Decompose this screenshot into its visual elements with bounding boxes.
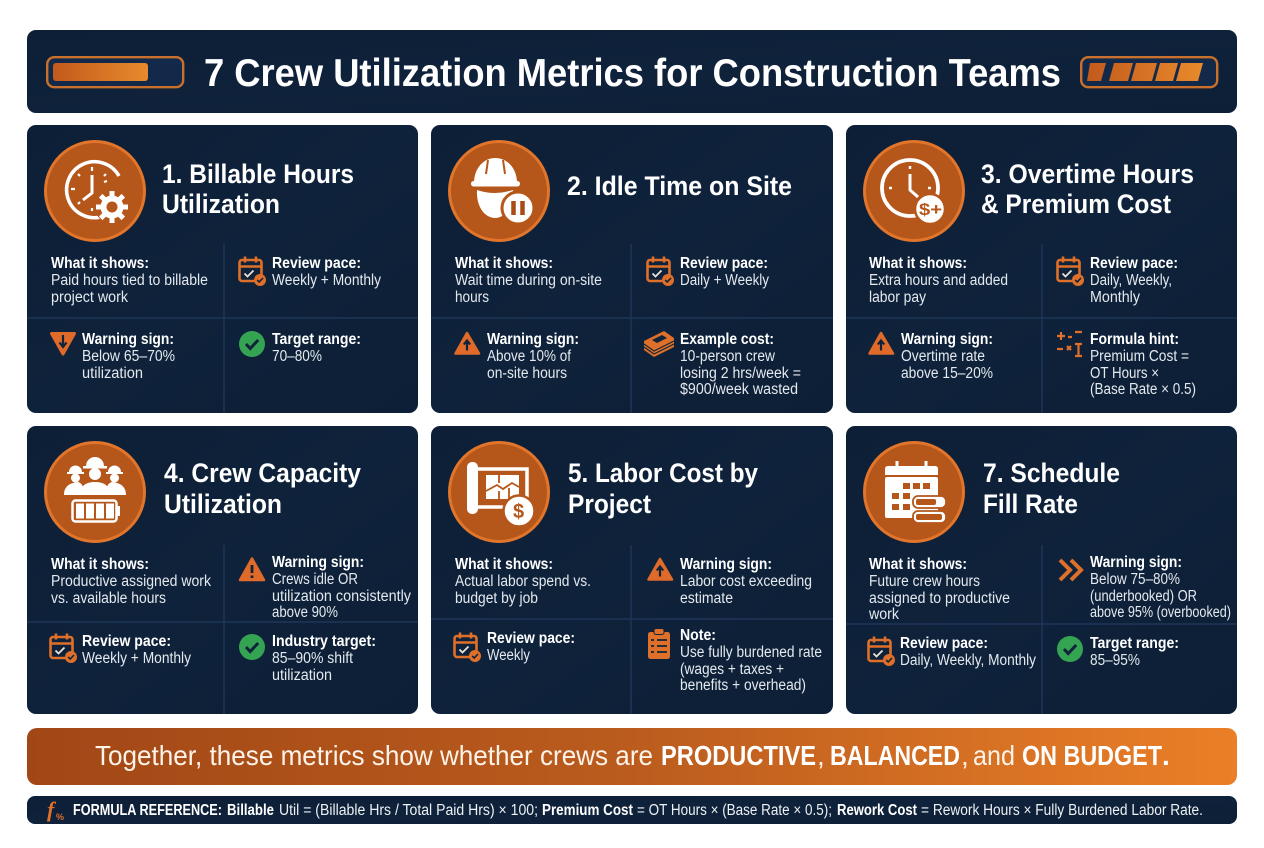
review pace [680, 255, 769, 289]
review pace: Monthly [1090, 289, 1140, 306]
icon: warning triangle [648, 559, 672, 580]
review pace: Review pace: [900, 635, 988, 652]
summary banner: PRODUCTIVE [661, 740, 816, 771]
icon: calendar with bars [864, 442, 964, 542]
warning sign: Above 10% of [487, 348, 572, 365]
warning sign: Crews idle OR [272, 571, 358, 588]
warning sign: utilization [82, 365, 143, 382]
target range [272, 331, 361, 365]
heading: & Premium Cost [981, 189, 1171, 219]
summary banner: Together, these metrics show whether crews are [95, 740, 653, 771]
what it shows: Wait time during on-site [455, 272, 602, 289]
warning sign [487, 331, 579, 382]
warning sign: Warning sign: [272, 554, 364, 571]
what it shows: Actual labor spend vs. [455, 573, 591, 590]
summary banner: , [817, 740, 825, 771]
icon: clock with dollar badge [864, 142, 964, 240]
icon: review calendar [868, 636, 895, 666]
what it shows [869, 255, 1008, 306]
what it shows: labor pay [869, 289, 926, 306]
what it shows: hours [455, 289, 489, 306]
panel: 5. Labor Cost by Project [431, 426, 833, 714]
warning sign: utilization consistently [272, 588, 411, 605]
warning sign: Warning sign: [1090, 554, 1182, 571]
heading: Project [568, 489, 651, 519]
warning sign: (underbooked) OR [1090, 588, 1197, 605]
icon: crew with battery [46, 442, 144, 542]
what it shows: What it shows: [51, 556, 149, 573]
example cost: $900/week wasted [680, 381, 798, 398]
what it shows: Productive assigned work [51, 573, 211, 590]
warning sign: Warning sign: [680, 556, 772, 573]
icon: formula f: % [56, 812, 64, 822]
warning sign: Warning sign: [901, 331, 993, 348]
icon: green check [239, 634, 265, 660]
icon: warning down triangle [52, 334, 74, 354]
review pace: Review pace: [487, 630, 575, 647]
review pace: Review pace: [680, 255, 768, 272]
note: benefits + overhead) [680, 677, 806, 694]
target range [1090, 635, 1179, 669]
icon: hard hat with pause badge [450, 142, 548, 240]
heading [981, 159, 1194, 219]
review pace [272, 255, 381, 289]
warning sign: above 15–20% [901, 365, 993, 382]
warning sign: Warning sign: [82, 331, 174, 348]
icon: clock with gear [46, 142, 144, 240]
heading: 3. Overtime Hours [981, 159, 1194, 189]
what it shows: Paid hours tied to billable [51, 272, 208, 289]
industry target: Industry target: [272, 633, 376, 650]
summary banner: , [961, 740, 969, 771]
review pace: Review pace: [272, 255, 361, 272]
icon: warning triangle [456, 333, 479, 354]
heading: 5. Labor Cost by [568, 458, 758, 488]
target range: 70–80% [272, 348, 322, 365]
summary banner: BALANCED [830, 740, 960, 771]
what it shows [51, 556, 211, 607]
heading [568, 458, 758, 519]
review pace: Weekly + Monthly [82, 650, 191, 667]
icon: formula symbols [1057, 332, 1082, 356]
target range: Target range: [272, 331, 361, 348]
what it shows [51, 255, 208, 306]
icon: review calendar [240, 256, 266, 286]
what it shows: Extra hours and added [869, 272, 1008, 289]
icon: formula f [47, 797, 64, 822]
warning sign: Below 75–80% [1090, 571, 1180, 588]
industry target [272, 633, 376, 684]
review pace [1090, 255, 1178, 306]
note: Note: [680, 627, 716, 644]
formula text: FORMULA REFERENCE: [73, 802, 222, 819]
example cost: losing 2 hrs/week = [680, 365, 801, 382]
review pace: Review pace: [1090, 255, 1178, 272]
icon: review calendar [1058, 256, 1084, 286]
review pace [900, 635, 1036, 669]
industry target: 85–90% shift [272, 650, 354, 667]
formula hint: Premium Cost = [1090, 348, 1189, 365]
warning sign: above 90% [272, 604, 338, 621]
review pace: Daily + Weekly [680, 272, 769, 289]
heading: 7. Schedule [983, 458, 1120, 488]
formula hint: (Base Rate × 0.5) [1090, 381, 1196, 398]
warning sign: Labor cost exceeding [680, 573, 812, 590]
review pace: Weekly [487, 647, 530, 664]
review pace: Review pace: [82, 633, 171, 650]
what it shows: What it shows: [455, 255, 553, 272]
what it shows: What it shows: [455, 556, 553, 573]
what it shows: What it shows: [869, 255, 967, 272]
panel: 7. Schedule Fill Rate [846, 426, 1237, 714]
formula text: = Rework Hours × Fully Burdened Labor Rate. [921, 802, 1203, 819]
icon: stack of money [644, 331, 674, 357]
review pace [487, 630, 575, 664]
icon: review calendar [50, 634, 77, 663]
what it shows: work [868, 606, 899, 623]
icon: warning exclamation [240, 558, 264, 580]
summary banner: ON BUDGET [1022, 740, 1162, 771]
heading: 4. Crew Capacity [164, 458, 361, 488]
what it shows: budget by job [455, 590, 538, 607]
industry target: utilization [272, 667, 332, 684]
warning sign: on-site hours [487, 365, 567, 382]
summary banner: and [973, 740, 1015, 771]
icon: double chevron [1060, 560, 1081, 580]
title: 7 Crew Utilization Metrics for Construction Teams [204, 52, 1061, 95]
formula text: Premium Cost [542, 802, 633, 819]
panel: 1. Billable Hours Utilization [27, 125, 418, 413]
heading: Utilization [164, 489, 282, 519]
note: Use fully burdened rate [680, 644, 822, 661]
icon: clipboard [648, 628, 670, 659]
summary banner: . [1162, 740, 1170, 771]
note [680, 627, 822, 694]
formula text: = OT Hours × (Base Rate × 0.5); [637, 802, 832, 819]
formula text: Rework Cost [837, 802, 917, 819]
icon: formula f: f [47, 797, 57, 822]
icon: green check [1057, 636, 1083, 662]
what it shows: Future crew hours [869, 573, 980, 590]
example cost: 10-person crew [680, 348, 776, 365]
panel: 3. Overtime Hours and Premium Cost [846, 125, 1237, 413]
icon: blueprint with dollar coin: $ [513, 501, 524, 523]
heading: 1. Billable Hours [162, 159, 354, 189]
target range: Target range: [1090, 635, 1179, 652]
icon: warning triangle [870, 333, 893, 354]
warning sign: Overtime rate [901, 348, 985, 365]
warning sign [901, 331, 993, 382]
formula text [73, 802, 1203, 819]
formula reference bar [27, 796, 1237, 824]
heading: Utilization [162, 189, 280, 219]
formula hint: Formula hint: [1090, 331, 1179, 348]
icon: blueprint with dollar coin [450, 442, 548, 542]
icon: review calendar [648, 256, 674, 286]
what it shows: What it shows: [51, 255, 149, 272]
heading: 2. Idle Time on Site [567, 171, 792, 201]
review pace [82, 633, 191, 667]
heading [162, 159, 354, 219]
warning sign: Warning sign: [487, 331, 579, 348]
title banner [27, 30, 1237, 113]
warning sign [272, 554, 411, 621]
formula hint [1090, 331, 1196, 398]
panel: 2. Idle Time on Site [431, 125, 833, 413]
what it shows: project work [51, 289, 128, 306]
panel: 4. Crew Capacity Utilization [27, 426, 418, 714]
icon: partly filled progress bar [47, 57, 183, 87]
heading [164, 458, 361, 519]
warning sign [680, 556, 812, 607]
summary banner [27, 728, 1237, 785]
target range: 85–95% [1090, 652, 1140, 669]
what it shows [455, 255, 602, 306]
warning sign: above 95% (overbooked) [1090, 604, 1231, 621]
icon: clock with dollar badge: $+ [919, 200, 942, 219]
icon: segmented progress bar [1081, 57, 1217, 87]
formula text: Util = (Billable Hrs / Total Paid Hrs) × 100; [279, 802, 538, 819]
heading [983, 458, 1120, 519]
what it shows [868, 556, 1010, 623]
formula text: Billable [227, 802, 274, 819]
warning sign [1090, 554, 1231, 621]
review pace: Weekly + Monthly [272, 272, 381, 289]
formula hint: OT Hours × [1090, 365, 1159, 382]
icon: review calendar [454, 632, 481, 662]
example cost: Example cost: [680, 331, 774, 348]
warning sign: Below 65–70% [82, 348, 175, 365]
what it shows: vs. available hours [51, 590, 166, 607]
review pace: Daily, Weekly, [1090, 272, 1172, 289]
warning sign [82, 331, 175, 382]
note: (wages + taxes + [680, 661, 784, 678]
what it shows [455, 556, 591, 607]
warning sign: estimate [680, 590, 733, 607]
what it shows: What it shows: [869, 556, 967, 573]
review pace: Daily, Weekly, Monthly [900, 652, 1036, 669]
icon: green check [239, 331, 265, 357]
what it shows: assigned to productive [869, 590, 1010, 607]
example cost [680, 331, 801, 398]
heading: Fill Rate [983, 489, 1078, 519]
